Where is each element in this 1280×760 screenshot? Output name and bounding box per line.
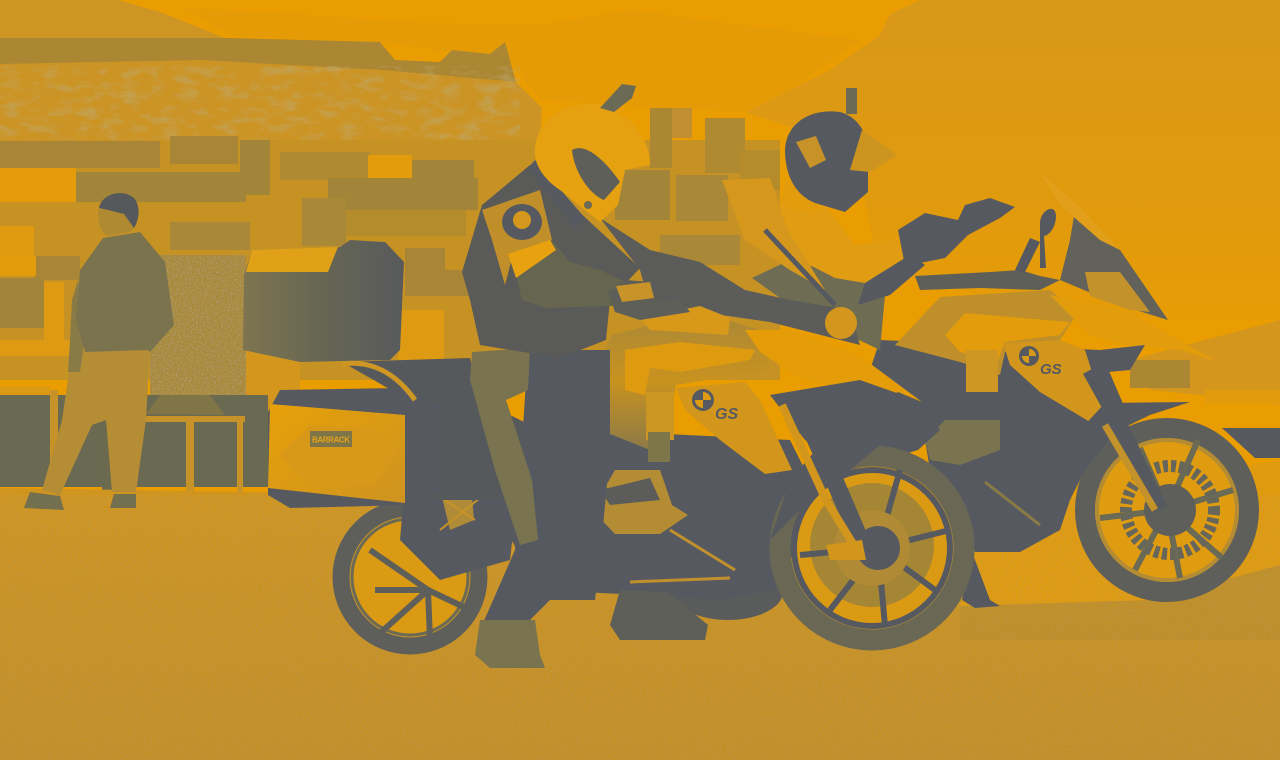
bike 2 cylinder — [925, 420, 1000, 465]
bike 1 exhaust — [630, 530, 735, 582]
rider 2 arm — [858, 250, 925, 305]
rim — [352, 519, 468, 635]
right ground light area — [960, 460, 1280, 606]
left hill top — [0, 0, 225, 40]
bike 2 headlight shroud — [1100, 345, 1145, 372]
rider 2 helmet camera — [846, 88, 857, 114]
bike 1 cylinder guard dark — [600, 478, 660, 505]
man hair — [99, 193, 139, 228]
brake disc — [834, 510, 910, 586]
inner wheel — [810, 483, 934, 607]
pannier label — [310, 431, 352, 447]
bike 2 exhaust pipe — [985, 482, 1040, 525]
bike 1 windscreen — [722, 178, 835, 305]
bike 1 handlebars and cockpit — [600, 218, 860, 345]
bike 2 GS label: GS — [1040, 361, 1062, 378]
man standing — [24, 193, 174, 510]
bike 2 side fairing — [1003, 340, 1110, 428]
bike 2 clear screen — [1040, 172, 1120, 250]
rider 1 helmet — [535, 104, 650, 222]
rider 2 torso dark — [752, 240, 890, 350]
tank highlight — [625, 342, 755, 395]
pannier label: BARRACK — [312, 436, 350, 444]
hillside — [0, 60, 542, 142]
bike 1 BMW roundel — [692, 389, 714, 411]
bike 2 beak — [1050, 295, 1218, 362]
bike 1 fender and side panel — [592, 380, 940, 582]
bike 2 kickstand — [962, 552, 1000, 608]
rider 1 jacket — [462, 165, 640, 358]
bike 2 suspension strut — [966, 350, 998, 392]
tyre — [341, 508, 479, 646]
bike 1 seat — [342, 358, 540, 500]
rider 1 reflective stripe — [508, 240, 556, 278]
bike 2 rear wheel behind — [673, 564, 783, 620]
rider 1 far boot — [610, 590, 708, 640]
rider 1 patch roundel — [513, 211, 531, 229]
bike 1 front wheel — [770, 395, 964, 640]
man sweater — [76, 232, 174, 352]
bike 2 — [850, 172, 1218, 608]
pannier moulding — [280, 425, 398, 485]
spokes — [800, 470, 950, 626]
bike 1 headlight — [825, 307, 857, 339]
man trousers — [42, 348, 150, 495]
spokes — [1100, 440, 1233, 578]
fender — [1070, 402, 1190, 500]
dark ridge with fortress — [0, 38, 516, 82]
rider 2 jacket — [770, 197, 905, 283]
top box — [243, 240, 404, 362]
bike 1 beak — [745, 330, 922, 402]
rider 1 visor opening — [572, 148, 620, 200]
bike 1 strut — [646, 392, 674, 440]
pannier face — [268, 404, 405, 503]
rider 1 thigh — [470, 348, 538, 545]
tyre — [1085, 428, 1249, 592]
ground — [0, 460, 1280, 760]
right village scrap — [1130, 320, 1280, 458]
rear shock frame — [400, 470, 520, 580]
bike 2 roundel quarters — [1022, 349, 1036, 363]
bike 2 windscreen — [1060, 210, 1168, 320]
rider 1 glove — [608, 280, 690, 320]
fork dark — [795, 395, 860, 540]
hub — [856, 526, 900, 570]
brake disc — [1126, 466, 1214, 554]
bike 2 tank highlight — [945, 313, 1070, 360]
bike 1 engine and frame — [500, 420, 820, 600]
bike 2 handlebar — [915, 270, 1060, 290]
bike 2 mirror — [1040, 209, 1056, 268]
bike 1 shock — [648, 432, 670, 462]
rider 1 near boot — [475, 620, 545, 668]
bike 2 dark body and engine — [850, 340, 1130, 552]
rider 2 neck — [780, 178, 830, 215]
rider 1 helmet camera — [600, 84, 636, 112]
seat rail — [342, 363, 415, 400]
rider 2 gloves — [898, 198, 1015, 266]
fork tube — [1105, 425, 1155, 510]
bike 1 roundel quarters — [695, 392, 711, 408]
rider 1 patch dark — [502, 204, 542, 240]
pannier — [268, 363, 440, 508]
rim — [1097, 440, 1237, 580]
rider 1 hand — [616, 282, 654, 302]
fork tube — [782, 405, 858, 552]
bike 1 dark vent — [770, 380, 940, 470]
hillside texture — [0, 66, 520, 142]
bike 2 tank — [895, 290, 1078, 375]
right ground shadow — [960, 565, 1280, 640]
rider 1 arm — [512, 240, 640, 308]
bike 1 side fairing — [676, 382, 792, 474]
ground texture — [0, 495, 1280, 760]
man shoes — [24, 492, 136, 510]
rider 2 helmet detail — [796, 136, 826, 168]
tank pale top — [640, 306, 730, 335]
bead stall — [150, 255, 300, 415]
rider 1 far leg — [480, 350, 610, 640]
right mountain — [745, 0, 1280, 320]
rider 1 — [462, 84, 708, 668]
spokes — [370, 550, 470, 640]
stall table — [0, 386, 268, 506]
bike 2 front wheel — [1070, 370, 1249, 592]
tyre — [780, 456, 964, 640]
fender — [770, 430, 925, 540]
rider 1 collar — [528, 160, 585, 228]
rear frame bracket — [438, 474, 474, 530]
rider 2 helmet — [785, 111, 868, 212]
man head — [98, 194, 138, 236]
bike 2 clutch lever — [1015, 238, 1040, 274]
pannier lid — [268, 388, 440, 508]
rider 2 — [752, 88, 1015, 350]
bike 1 tank — [575, 306, 770, 450]
muffler stub — [440, 490, 490, 530]
rider 1 chin vent — [584, 201, 592, 209]
rim — [794, 470, 950, 626]
bike 1 GS label: GS — [715, 406, 738, 423]
distant mountains — [185, 8, 860, 112]
hub — [1144, 484, 1196, 536]
rider 2 visor — [850, 130, 897, 172]
fork foot — [826, 540, 866, 560]
bike 1 cylinder guard — [592, 470, 688, 534]
bike 2 headlight fairing — [1085, 272, 1150, 312]
man far arm and hand — [68, 280, 86, 372]
kasbah town — [0, 108, 780, 380]
fork — [1090, 370, 1160, 510]
bike 1 rear wheel — [341, 470, 520, 646]
rider 1 shoulder patch — [482, 190, 552, 285]
bike 2 BMW roundel — [1019, 346, 1039, 366]
